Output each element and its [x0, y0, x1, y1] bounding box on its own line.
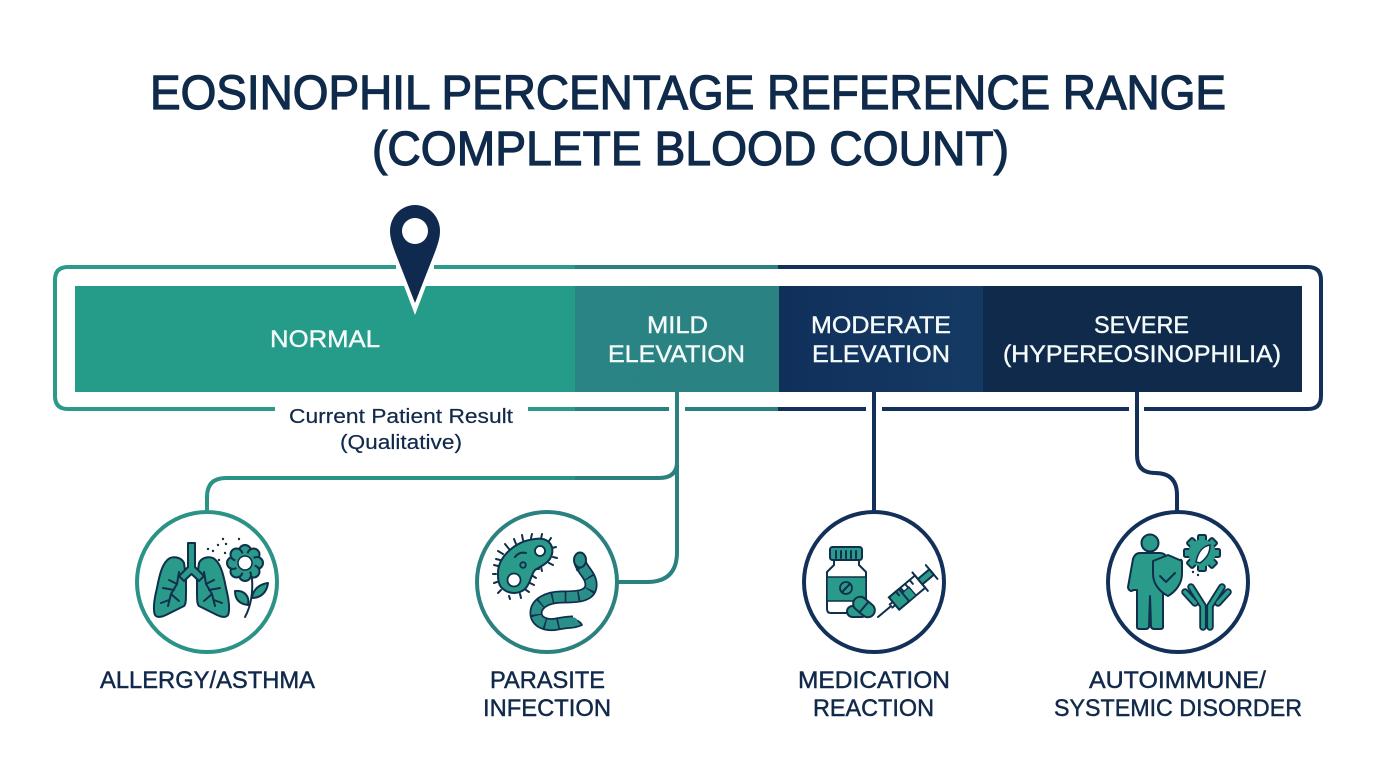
segment: normal	[75, 286, 575, 392]
connector: severe to autoimmune	[1137, 392, 1177, 511]
label	[1054, 667, 1302, 722]
cause: autoimmune / systemic disorder	[1054, 512, 1302, 722]
label: REACTION	[813, 695, 934, 722]
icon: antibody	[1185, 587, 1228, 627]
current patient result caption	[289, 406, 513, 454]
label: MEDICATION	[798, 667, 950, 694]
label: SYSTEMIC DISORDER	[1054, 695, 1302, 722]
icon: pills	[847, 594, 878, 620]
current patient result caption: (Qualitative)	[340, 432, 462, 454]
segment: severe	[983, 286, 1302, 392]
segment: mild elevation: MILD	[647, 312, 708, 339]
connector: mild elevation to allergy and parasite	[207, 392, 677, 582]
icon: syringe	[870, 563, 939, 626]
range frame outline	[55, 267, 1321, 409]
segment: moderate elevation: ELEVATION	[812, 341, 950, 368]
label: ALLERGY/ASTHMA	[100, 667, 315, 694]
icon: gear	[1180, 535, 1220, 576]
icon: pill bottle	[827, 547, 866, 613]
cause: allergy/asthma	[100, 512, 315, 694]
label	[483, 667, 611, 722]
location pin marker	[390, 205, 440, 315]
title: (COMPLETE BLOOD COUNT)	[372, 123, 1009, 176]
label	[798, 667, 950, 722]
segment: mild elevation	[575, 286, 779, 392]
title: EOSINOPHIL PERCENTAGE REFERENCE RANGE	[150, 67, 1226, 120]
range bar	[75, 286, 1302, 392]
label: AUTOIMMUNE/	[1089, 667, 1266, 694]
segment: normal: NORMAL	[270, 326, 380, 353]
icon: bacterium	[493, 534, 557, 599]
icon: person with shield	[1128, 534, 1182, 629]
cause: parasite infection	[477, 512, 617, 722]
icon: lungs	[154, 543, 229, 617]
segment: severe: (HYPEREOSINOPHILIA)	[1003, 341, 1281, 368]
segment: moderate elevation: MODERATE	[811, 312, 951, 339]
title	[150, 67, 1226, 176]
segment: severe: SEVERE	[1094, 312, 1189, 339]
cause: medication reaction	[798, 512, 950, 722]
label: PARASITE	[490, 667, 605, 694]
segment: mild elevation: ELEVATION	[608, 341, 745, 368]
label: INFECTION	[483, 695, 611, 722]
icon: flower and pollen	[207, 538, 268, 617]
segment: moderate elevation	[779, 286, 983, 392]
icon: worm	[536, 552, 591, 628]
connector: moderate elevation to medication	[872, 392, 876, 511]
current patient result caption: Current Patient Result	[289, 406, 513, 428]
